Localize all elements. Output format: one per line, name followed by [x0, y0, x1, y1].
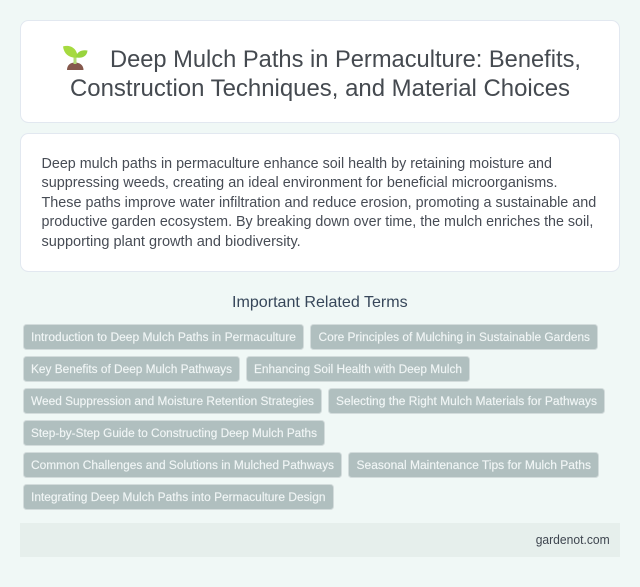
- title: Deep Mulch Paths in Permaculture: Benefits,: [110, 46, 581, 73]
- tag: Selecting the Right Mulch Materials for Pathways: [336, 394, 597, 408]
- tag: [24, 452, 342, 478]
- tag: Weed Suppression and Moisture Retention Strategies: [31, 394, 314, 408]
- tag: Introduction to Deep Mulch Paths in Permaculture: [31, 330, 296, 344]
- tag: Enhancing Soil Health with Deep Mulch: [254, 362, 462, 376]
- panel: title card: [20, 20, 620, 122]
- tag: [24, 388, 322, 414]
- tag: Integrating Deep Mulch Paths into Permaculture Design: [31, 490, 326, 504]
- description text: supporting plant growth and biodiversity.: [42, 234, 301, 250]
- tag: [24, 324, 304, 350]
- title: [70, 46, 581, 102]
- tag: [246, 356, 470, 382]
- tag: [328, 388, 604, 414]
- panel: related term tags: [24, 324, 604, 510]
- footer: gardenot.com: [536, 533, 610, 547]
- tag: Step-by-Step Guide to Constructing Deep Mulch Paths: [31, 426, 317, 440]
- footer: [20, 523, 620, 557]
- tag: Common Challenges and Solutions in Mulched Pathways: [31, 458, 334, 472]
- tag: [24, 484, 334, 510]
- tag: [24, 356, 240, 382]
- panel: description card: [20, 134, 620, 272]
- tag: Key Benefits of Deep Mulch Pathways: [31, 362, 232, 376]
- tag: Core Principles of Mulching in Sustainable Gardens: [318, 330, 590, 344]
- heading: related terms: Important Related Terms: [232, 294, 408, 311]
- description text: Deep mulch paths in permaculture enhance soil health by retaining moisture and: [42, 156, 552, 172]
- tag: [24, 420, 324, 446]
- description text: [42, 156, 596, 250]
- icon: seedling: [63, 46, 88, 70]
- title: Construction Techniques, and Material Choices: [70, 75, 570, 102]
- description text: suppressing weeds, creating an ideal environment for beneficial microorganisms.: [42, 175, 558, 191]
- tag: [310, 324, 598, 350]
- description text: productive garden ecosystem. By breaking down over time, the mulch enriches the soil,: [42, 214, 593, 230]
- tag: Seasonal Maintenance Tips for Mulch Paths: [356, 458, 591, 472]
- tag: [348, 452, 598, 478]
- description text: These paths improve water infiltration and reduce erosion, promoting a sustainable and: [42, 195, 596, 211]
